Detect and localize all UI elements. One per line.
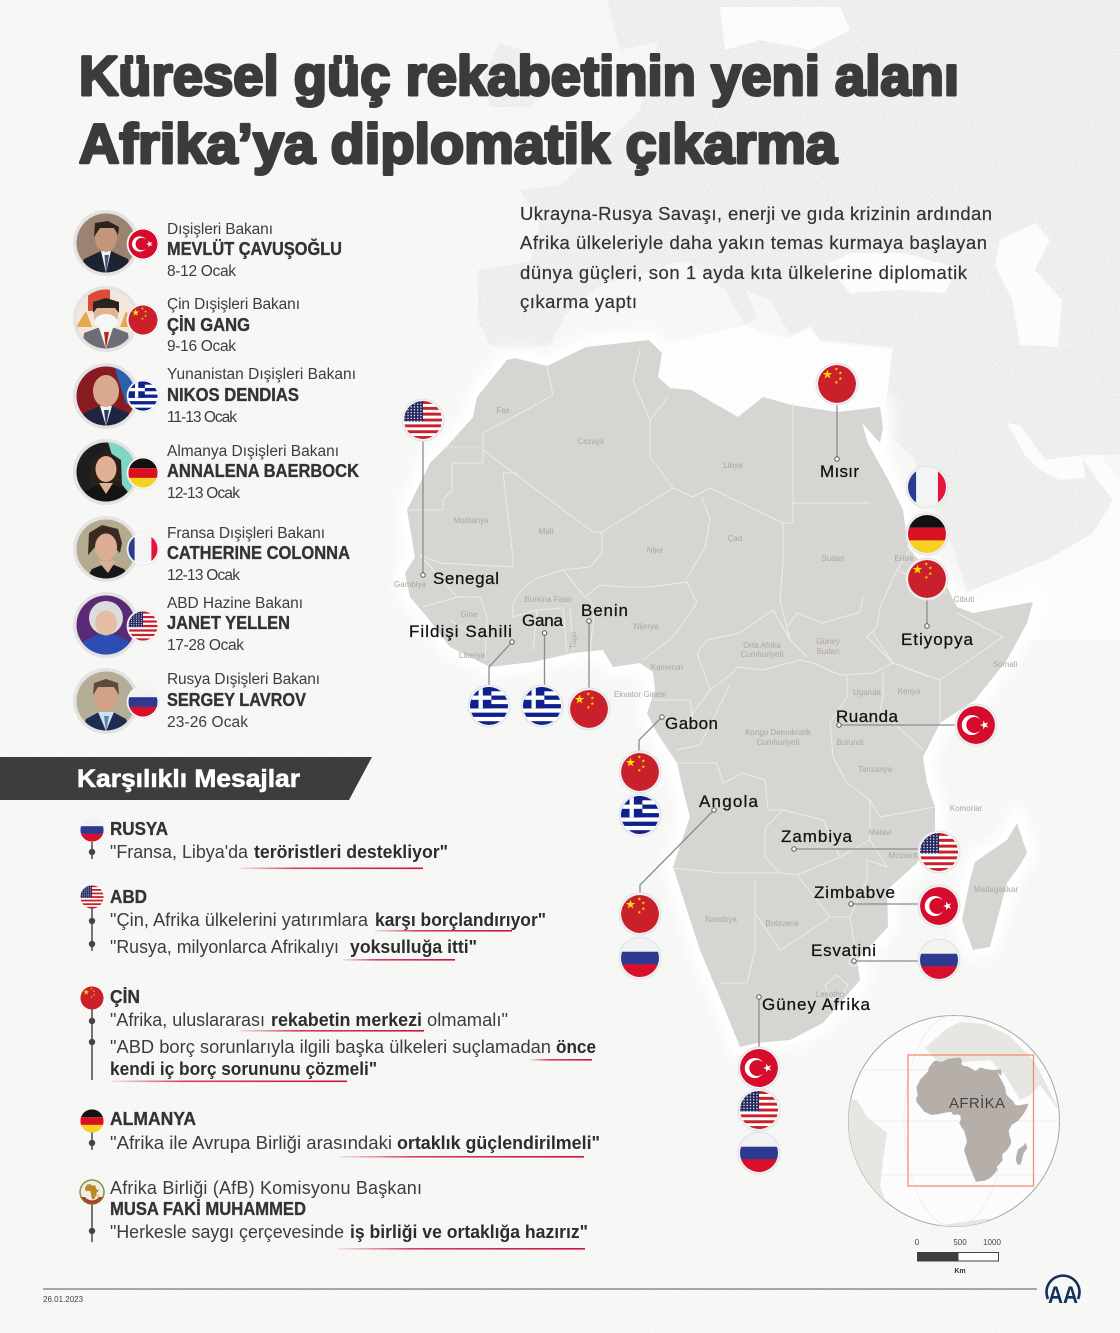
callout: Senegal [402,399,499,588]
callout: Zambiya: Zambiya [781,827,853,846]
callout: Zambiya [781,827,960,873]
small country labels: Cumhuriyeti [757,738,800,747]
small country labels: Libya [723,461,743,470]
minister: Nikos Dendias [73,363,356,429]
message: Afrika Birliği: "Herkesle saygı çerçevesinde [110,1222,344,1242]
callout: Ruanda: Ruanda [836,707,899,726]
message: Çin: "ABD borç sorunlarıyla ilgili başka ülkeleri suçlamadan [110,1037,551,1057]
title: Afrika’ya diplomatik çıkarma [79,112,838,175]
small country labels: Kongo Demokratik [745,728,812,737]
intro text: dünya güçleri, son 1 ayda kıta ülkelerine diplomatik [520,262,968,283]
small country labels: Uganda [853,688,882,697]
callout: Gabon: Gabon [665,714,718,733]
small country labels: Eritre [894,554,914,563]
locator globe [846,1015,1060,1232]
callout: Güney Afrika: Güney Afrika [762,995,871,1014]
minister: Annalena Baerbock: ANNALENA BAERBOCK [167,461,359,481]
message: Almanya: "Afrika ile Avrupa Birliği arasındaki [110,1133,392,1153]
small country labels: Komorlar [950,804,983,813]
small country labels: Çad [728,534,742,543]
small country labels: Malavi [868,828,892,837]
callout: Fildişi Sahili: Fildişi Sahili [409,622,512,641]
logo: AA: AA [1048,1282,1078,1309]
message: Rusya [80,818,448,869]
scale bar: 0 [915,1238,920,1247]
minister: Catherine Colonna [73,516,350,584]
minister: Çin Gang: ÇİN GANG [167,315,250,335]
minister: Janet Yellen: 17-28 Ocak [167,637,244,654]
callout: Etiyopya: Etiyopya [901,630,974,649]
minister: Annalena Baerbock: Almanya Dışişleri Bakanı [167,443,339,460]
minister: Janet Yellen: JANET YELLEN [167,613,290,633]
callout: Gabon [619,714,718,836]
scale bar: 500 [953,1238,967,1247]
minister: Çin Gang: Çin Dışişleri Bakanı [167,296,300,313]
small country labels: Mali [539,527,554,536]
minister: Nikos Dendias: 11-13 Ocak [167,409,237,426]
small country labels: Cezayir [577,437,605,446]
small country labels: Gambiya [394,580,427,589]
intro text: çıkarma yaptı [520,291,637,312]
banner: Karşılıklı Mesajlar: Karşılıklı Mesajlar [77,765,300,793]
callout: Etiyopya [901,466,974,649]
icon: African Union emblem [80,1180,104,1204]
small country labels: Kenya [898,687,921,696]
intro text [520,203,992,312]
message: ABD: "Rusya, milyonlarca Afrikalıyı [110,937,339,957]
scale bar: 1000 [983,1238,1001,1247]
small country labels: Fas [496,406,510,415]
callout: Esvatini [811,939,960,981]
callout: Ruanda [836,704,997,746]
callout: Fildişi Sahili [409,622,514,727]
small country labels: Mozambik [889,851,926,860]
minister: Catherine Colonna: CATHERINE COLONNA [167,543,350,563]
small country labels: Kamerun [651,663,683,672]
message: Rusya: RUSYA [110,819,168,839]
message: Çin: ÇİN [110,987,140,1007]
message: Çin: rekabetin merkezi [271,1010,422,1030]
small country labels: Moritanya [453,516,489,525]
message: ABD [80,885,546,961]
minister: Sergey Lavrov: Rusya Dışişleri Bakanı [167,671,320,688]
small country labels: Güney [816,637,840,646]
small country labels: Nijer [647,546,664,555]
message: Rusya: teröristleri destekliyor" [254,842,448,862]
message: Afrika Birliği: iş birliği ve ortaklığa hazırız" [350,1222,588,1242]
scale bar: Km [954,1268,966,1275]
minister: Çin Gang: 9-16 Ocak [167,338,236,355]
small country labels [394,406,1018,999]
minister: Mevlüt Çavuşoğlu [73,210,342,280]
small country labels: Lesotho [816,990,845,999]
small country labels: Burundi [836,738,864,747]
small country labels: Liberya [459,651,486,660]
message: Afrika Birliği [80,1178,588,1250]
scale bar [915,1238,1001,1275]
small country labels: Namibya [705,915,737,924]
minister: Mevlüt Çavuşoğlu: MEVLÜT ÇAVUŞOĞLU [167,238,342,259]
small country labels: Orta Afrika [743,641,781,650]
country borders [408,350,1003,1000]
message: Afrika Birliği: Afrika Birliği (AfB) Komisyonu Başkanı [110,1178,422,1198]
callout: Angola: Angola [699,792,759,811]
small country labels: Cumhuriyeti [741,650,784,659]
callout: Zimbabve: Zimbabve [814,883,895,902]
message: Çin: olmamalı" [427,1010,508,1030]
small country labels: Burkina Faso [524,595,572,604]
callout: Esvatini: Esvatini [811,941,876,960]
minister: Nikos Dendias: NIKOS DENDIAS [167,385,299,405]
minister: Nikos Dendias: Yunanistan Dışişleri Bakanı [167,366,356,383]
message: Almanya: ALMANYA [110,1109,196,1129]
banner: Karşılıklı Mesajlar [0,757,372,800]
callout: Gana [521,611,564,727]
small country labels: Botsvana [765,919,799,928]
minister: Çin Gang [73,286,300,355]
minister: Catherine Colonna: 12-13 Ocak [167,567,240,584]
message: ABD: yoksulluğa itti" [350,937,477,957]
callout: Gana: Gana [522,611,564,630]
callout: Benin [568,601,628,730]
title: Küresel güç rekabetinin yeni alanı [79,44,959,107]
message: Rusya: "Fransa, Libya'da [110,842,249,862]
small country labels: Gine [461,610,478,619]
message: ABD: karşı borçlandırıyor" [375,910,546,930]
small country labels: Madagaskar [974,885,1018,894]
map callouts [402,363,997,1174]
message: Almanya: ortaklık güçlendirilmeli" [397,1133,600,1153]
callout: Zimbabve [814,883,960,927]
minister: Sergey Lavrov: SERGEY LAVROV [167,690,306,710]
callout: Angola [619,792,759,979]
title [79,44,959,175]
footer: date: 26.01.2023 [43,1295,84,1304]
small country labels: Sudan [816,647,840,656]
message: ABD: ABD [110,887,147,907]
small country labels: Somali [993,660,1017,669]
small country labels: Sudan [821,554,845,563]
callout: Senegal: Senegal [433,569,499,588]
map: Africa [394,325,1033,1047]
minister: Mevlüt Çavuşoğlu: 8-12 Ocak [167,263,236,280]
message: Afrika Birliği: MUSA FAKİ MUHAMMED [110,1199,306,1219]
callout: Mısır: Mısır [820,462,859,481]
small country labels: Ekvator Ginesi [614,690,666,699]
message: Almanya [80,1109,600,1158]
minister: Mevlüt Çavuşoğlu: Dışişleri Bakanı [167,221,273,238]
callout: Benin: Benin [581,601,628,620]
panel: messages [80,818,600,1250]
locator globe: AFRİKA [949,1094,1005,1112]
minister: Sergey Lavrov [73,668,320,734]
intro text: Afrika ülkeleriyle daha yakın temas kurmaya başlayan [520,232,987,253]
small country labels: Cibuti [954,595,974,604]
minister: Annalena Baerbock [73,439,359,505]
message: Çin: "Afrika, uluslararası [110,1010,265,1030]
intro text: Ukrayna-Rusya Savaşı, enerji ve gıda krizinin ardından [520,203,992,224]
message: ABD: "Çin, Afrika ülkelerini yatırımlara [110,910,369,930]
message: Çin: kendi iç borç sorununu çözmeli" [110,1059,377,1079]
message: Çin: önce [556,1037,596,1057]
minister: Sergey Lavrov: 23-26 Ocak [167,714,248,731]
callout: Güney Afrika [738,995,871,1174]
callout: Mısır [816,363,859,481]
small country labels: Tanzanya [858,765,893,774]
panel: ministers [73,210,359,734]
small country labels: Nijerya [634,622,659,631]
minister: Catherine Colonna: Fransa Dışişleri Bakanı [167,525,325,542]
small country labels: Togo [569,631,578,649]
minister: Annalena Baerbock: 12-13 Ocak [167,485,240,502]
message: Çin [80,986,596,1082]
minister: Janet Yellen: ABD Hazine Bakanı [167,595,303,612]
minister: Janet Yellen [73,592,303,658]
